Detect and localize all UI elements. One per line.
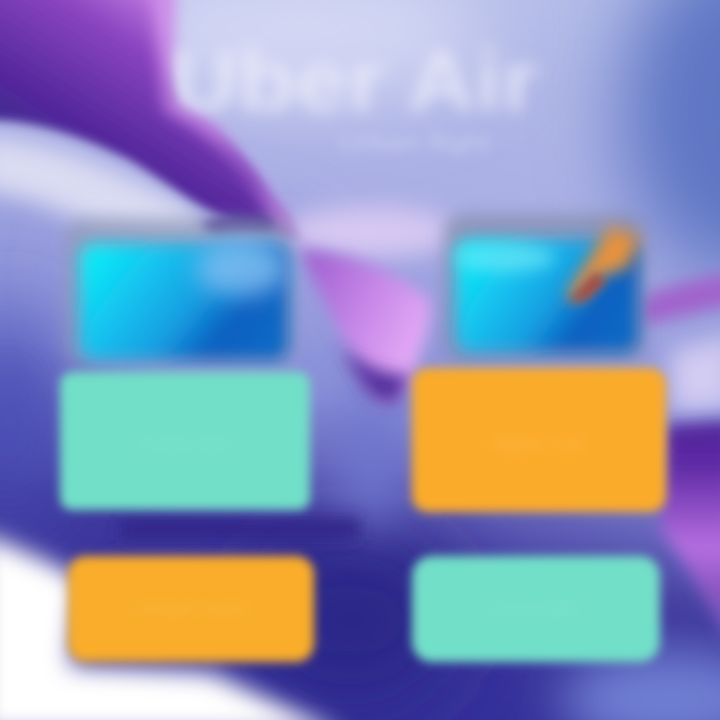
- subtitle: Urban flight: [340, 130, 490, 155]
- band under top cards: [120, 518, 360, 540]
- text: bottom-left card: Limited routes: [133, 599, 247, 619]
- purple wave: [0, 0, 720, 405]
- title: Uber Air: [170, 34, 538, 128]
- panel: top-left teal card: [60, 372, 310, 510]
- text: top-right card: Higher cost: [492, 434, 584, 454]
- light swoosh left: [0, 135, 210, 235]
- icon: left app tile: [66, 218, 292, 364]
- icon: orange pencil: [566, 226, 640, 302]
- text: top-left card: Faster trips: [140, 434, 230, 454]
- purple band right: [660, 420, 720, 650]
- panel: bottom-left orange card: [68, 556, 314, 662]
- highlight: lilac above middle wave: [285, 206, 455, 258]
- icon: right app tile: [444, 214, 644, 362]
- purple wave: middle lilac section: [298, 250, 431, 402]
- panel: top-right orange card: [412, 368, 666, 512]
- purple wave: dark lower fold: [340, 345, 412, 405]
- text: bottom-right card: Less traffic: [493, 599, 579, 619]
- highlight: light right panel: [670, 335, 720, 412]
- purple wave: right ribbon: [640, 272, 720, 325]
- white glow bottom-left: [0, 532, 345, 720]
- panel: bottom-right teal card: [412, 556, 660, 662]
